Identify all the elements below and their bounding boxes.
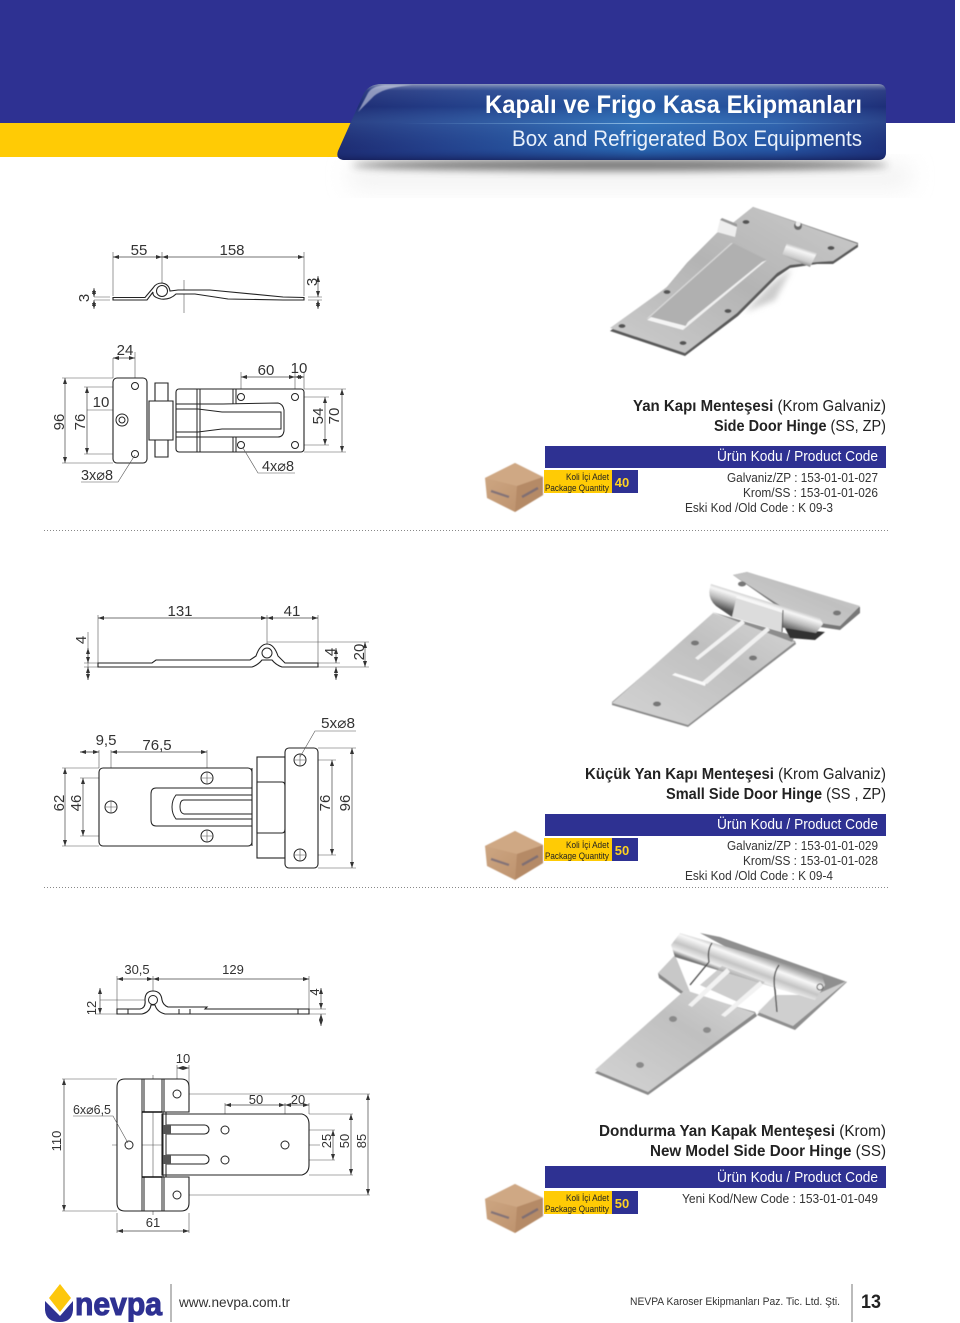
product codes: Krom/SS : 153-01-01-028 <box>743 854 878 868</box>
package quantity badge <box>544 1191 638 1215</box>
package quantity badge: Koli İçi Adet <box>566 472 609 483</box>
plan view: 5x⌀8 <box>321 715 355 732</box>
header band <box>0 0 955 157</box>
plan view: 4x⌀8 <box>262 458 294 475</box>
plan view <box>49 1051 370 1233</box>
package quantity badge <box>544 470 638 494</box>
product code bar: Ürün Kodu / Product Code <box>717 1168 878 1186</box>
footer logo <box>45 1284 162 1322</box>
product codes: Galvaniz/ZP : 153-01-01-027 <box>727 471 878 485</box>
product title: side door hinge <box>633 398 886 435</box>
side view: 4 <box>73 636 90 644</box>
side view: 55 <box>131 242 147 259</box>
plan view <box>51 715 356 868</box>
package quantity badge: Koli İçi Adet <box>566 1193 609 1204</box>
product code bar: Ürün Kodu / Product Code <box>717 815 878 833</box>
plan view: 3x⌀8 <box>81 467 113 484</box>
title banner <box>337 84 886 160</box>
footer logo: nevpa <box>75 1286 162 1322</box>
product code: Yeni Kod/New Code : 153-01-01-049 <box>682 1192 878 1206</box>
side view: 12 <box>84 1001 99 1015</box>
company name: NEVPA Karoser Ekipmanları Paz. Tic. Ltd. Şti. <box>630 1296 840 1308</box>
product codes: Eski Kod /Old Code : K 09-4 <box>685 869 833 883</box>
banner shadow <box>352 159 888 171</box>
plan view: 76,5 <box>142 737 172 754</box>
plan view: 50 <box>249 1092 263 1107</box>
side view: 3 <box>304 278 321 286</box>
plan view: 25 <box>319 1134 334 1148</box>
plan view: 61 <box>146 1215 160 1230</box>
side view: 30,5 <box>124 962 150 977</box>
package quantity badge: 40 <box>615 475 629 490</box>
plan view: 54 <box>310 408 327 424</box>
plan view: 110 <box>49 1131 64 1151</box>
package quantity badge <box>544 838 638 862</box>
side view <box>76 242 322 313</box>
product codes: Eski Kod /Old Code : K 09-3 <box>685 501 833 515</box>
product title: small side door hinge: Küçük Yan Kapı Menteşesi (Krom Galvaniz) <box>585 766 886 783</box>
side view: 4 <box>322 648 339 656</box>
product title: side door hinge: Side Door Hinge (SS, ZP) <box>714 418 886 435</box>
side view <box>84 962 326 1026</box>
title English: Box and Refrigerated Box Equipments <box>512 126 862 151</box>
plan view: 96 <box>337 795 354 811</box>
page number: 13 <box>861 1292 881 1313</box>
side view: 158 <box>219 242 245 259</box>
product code bar <box>545 1166 886 1188</box>
product title: side door hinge: Yan Kapı Menteşesi (Krom Galvaniz) <box>633 398 886 415</box>
product title: new model side door hinge: New Model Side Door Hinge (SS) <box>650 1143 886 1160</box>
product title: small side door hinge: Small Side Door Hinge (SS , ZP) <box>666 786 886 803</box>
plan view: 76 <box>72 414 89 430</box>
plan view: 62 <box>51 795 68 811</box>
plan view: 10 <box>93 394 109 411</box>
plan view: 85 <box>354 1134 369 1148</box>
package quantity badge: 50 <box>615 1196 629 1211</box>
product codes: Galvaniz/ZP : 153-01-01-029 <box>727 839 878 853</box>
plan view: 76 <box>317 795 334 811</box>
product codes: Krom/SS : 153-01-01-026 <box>743 486 878 500</box>
icon: cardboard box <box>485 1184 543 1233</box>
website: www.nevpa.com.tr <box>178 1295 290 1310</box>
side view: 41 <box>284 603 300 620</box>
side view <box>73 603 369 680</box>
plan view <box>51 342 346 484</box>
package quantity badge: Package Quantity <box>545 483 609 494</box>
icon: cardboard box <box>485 463 543 512</box>
plan view: 50 <box>337 1134 352 1148</box>
product photo: new model side door hinge <box>595 933 847 1095</box>
title Turkish: Kapalı ve Frigo Kasa Ekipmanları <box>485 91 862 119</box>
product code bar <box>545 446 886 468</box>
plan view: 10 <box>176 1051 190 1066</box>
side view: 3 <box>76 294 93 302</box>
product code bar: Ürün Kodu / Product Code <box>717 447 878 465</box>
package quantity badge: Koli İçi Adet <box>566 840 609 851</box>
plan view: 24 <box>117 342 133 359</box>
plan view: 9,5 <box>96 732 116 749</box>
product title: new model side door hinge: Dondurma Yan Kapak Menteşesi (Krom) <box>599 1123 886 1140</box>
side view: 131 <box>167 603 193 620</box>
side view: 20 <box>351 644 368 660</box>
product title: new model side door hinge <box>599 1123 886 1160</box>
plan view: 96 <box>51 414 68 430</box>
side view: 4 <box>307 988 322 996</box>
package quantity badge: Package Quantity <box>545 851 609 862</box>
plan view: 10 <box>291 360 307 377</box>
plan view: 20 <box>291 1092 305 1107</box>
product photo: side door hinge <box>610 207 858 356</box>
icon: cardboard box <box>485 831 543 880</box>
technical drawing: new model side door hinge <box>49 962 370 1233</box>
technical drawing: small side door hinge <box>51 603 369 868</box>
technical drawing: side door hinge <box>51 242 346 484</box>
product codes <box>685 839 878 883</box>
plan view: 60 <box>258 362 274 379</box>
icon: logo diamond and chevron <box>45 1284 73 1322</box>
plan view: 70 <box>326 408 343 424</box>
product code bar <box>545 814 886 836</box>
plan view: 6x⌀6,5 <box>73 1102 111 1117</box>
package quantity badge: 50 <box>615 843 629 858</box>
banner glow <box>350 165 910 187</box>
product codes <box>685 471 878 515</box>
product title: small side door hinge <box>585 766 886 803</box>
plan view: 46 <box>68 795 85 811</box>
side view: 129 <box>222 962 244 977</box>
package quantity badge: Package Quantity <box>545 1204 609 1215</box>
product photo: small side door hinge <box>612 572 860 727</box>
